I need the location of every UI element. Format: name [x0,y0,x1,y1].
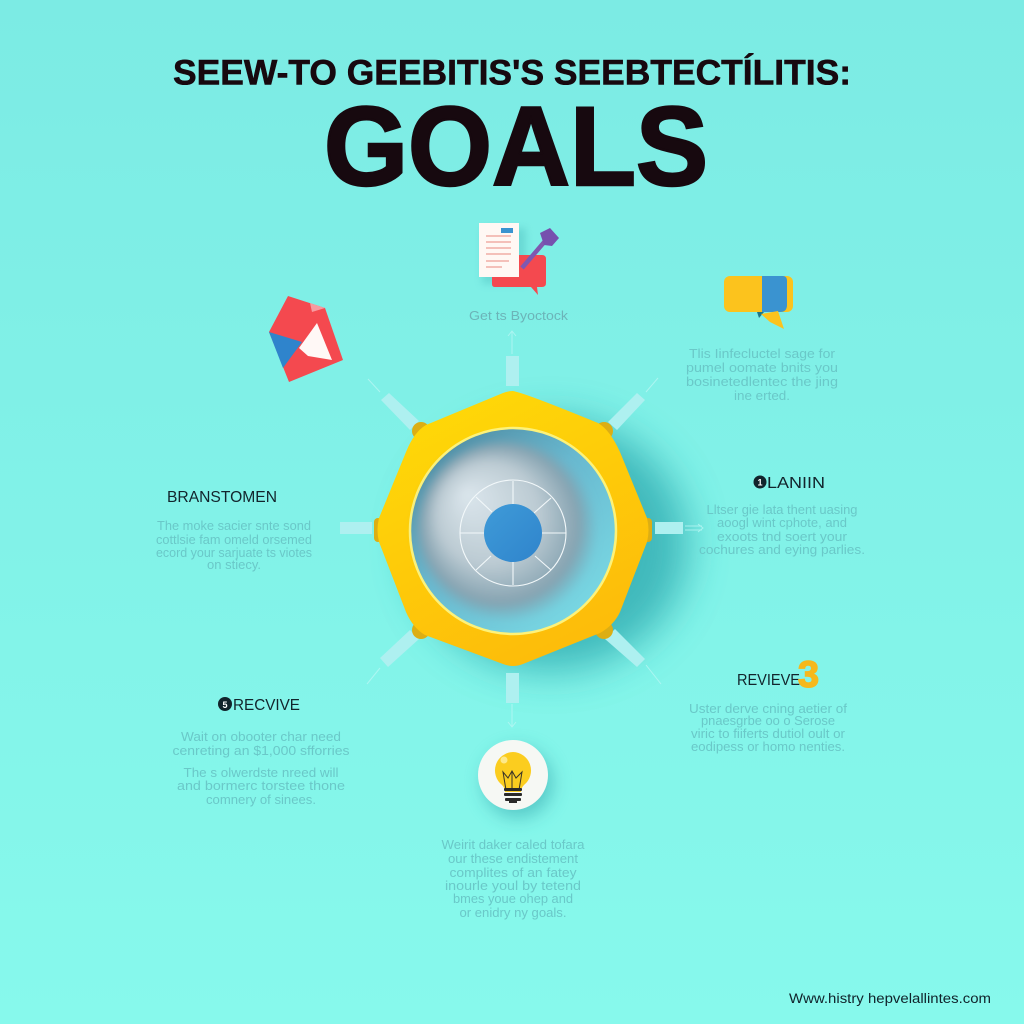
title [173,52,851,209]
section: brainstorm: on stiecy. [207,557,261,572]
number badge 1 [754,476,766,488]
text: bottom description: inourle youl by tetend [445,878,581,893]
text: top right description: ine erted. [734,388,790,403]
number badge 1: 1 [757,478,763,488]
section: receive: and bormerc torstee thone [177,778,345,793]
section: planning: cochures and eying parlies. [699,542,865,557]
text: bottom description: Weirit daker caled tofara [442,837,585,852]
ring inner well [410,428,616,634]
section: review: eodipess or homo nenties. [691,739,845,754]
icon: light bulb in white circle [478,740,553,818]
section: review [689,654,847,754]
number badge: 5 [222,700,228,710]
section: planning: exoots tnd soert your [717,529,848,544]
section: review: viric to fiiferts dutiol oult or [691,726,846,741]
section: review: Uster derve cning aetier of [689,701,847,716]
label: top icon caption: Get ts Byoctock [469,308,569,323]
subtitle line: SEEW-TO GEEBITIS'S SEEBTECTÍLITIS: [173,52,851,92]
section: review: REVIEVE [737,672,800,689]
grey sphere [414,438,598,622]
section: receive: comnery of sinees. [206,792,316,807]
section: receive: The s olwerdste nreed will [184,765,339,780]
darker ring corner knobs [374,422,652,639]
section: planning: Lltser gie lata thent uasing [706,502,858,517]
text: bottom description: our these endistement [448,851,578,866]
number badge [218,697,232,711]
text: bottom description: or enidry ny goals. [460,905,566,920]
section: review: pnaesgrbe oo o Serose [701,713,835,728]
icon: red kite envelope [269,296,343,382]
main heading: GOALS [324,84,708,209]
text: top right description: pumel oomate bnits you [686,360,838,375]
section: brainstorm [156,489,312,572]
text: top right description: bosinetedlentec the jing [686,374,838,389]
number badge 3: 3 [798,654,819,695]
text: top right description [686,346,838,403]
section: receive: RECVIVE [233,697,300,714]
central dial [374,391,652,666]
spokes radiating from dial [340,331,703,727]
yellow octagonal ring [378,391,648,666]
section: planning: aoogl wint cphote, and [717,515,847,530]
section: receive: Wait on obooter char need [181,729,341,744]
section: receive [172,697,350,807]
section: brainstorm: BRANSTOMEN [167,489,277,506]
text: bottom description: bmes youe ohep and [453,891,573,906]
section: planning [699,475,865,557]
footer url: Www.histry hepvelallintes.com [789,991,991,1006]
central dial shadow [412,419,688,671]
section: planning: LANIIN [767,475,825,492]
text: top right description: Tlis Iinfecluctel sage for [689,346,836,361]
section: receive: cenreting an $1,000 sfforries [172,743,350,758]
text: bottom description [442,837,585,920]
icon: yellow and blue speech bubble [724,276,793,329]
section: brainstorm: cottlsie fam omeld orsemed [156,532,312,547]
blue hub [484,504,542,562]
section: brainstorm: ecord your sarjuate ts viotes [156,545,312,560]
section: brainstorm: The moke sacier snte sond [157,518,311,533]
icon: document with pen and speech bubble [479,223,559,295]
wheel lines [460,480,566,586]
text: bottom description: complites of an fatey [450,865,577,880]
